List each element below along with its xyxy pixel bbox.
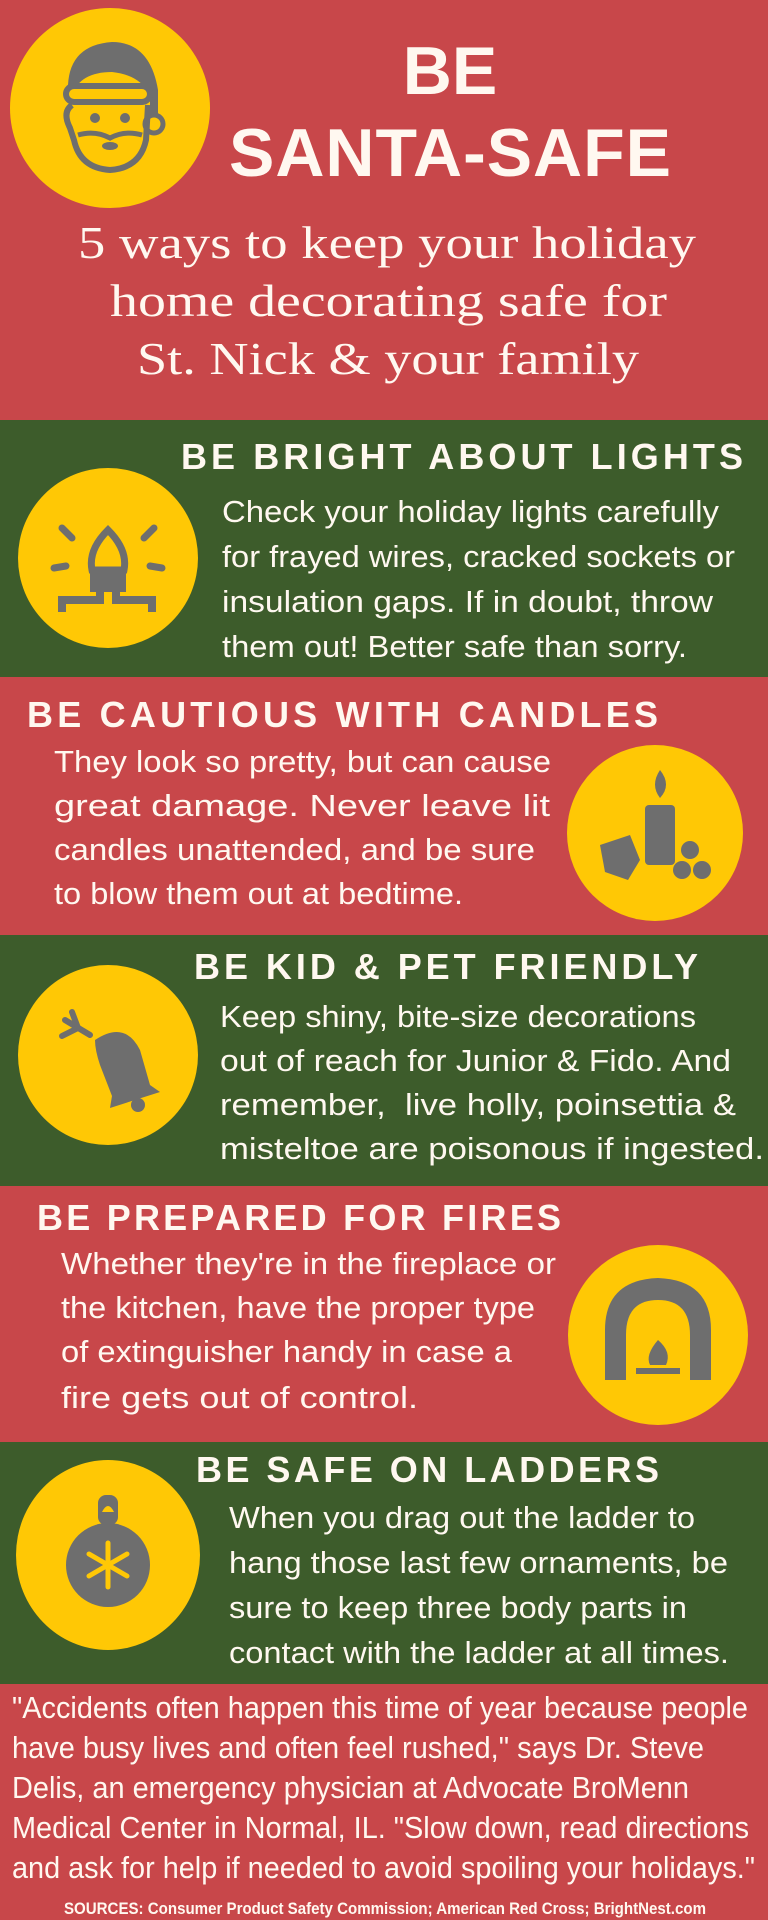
title: BE [403, 33, 497, 109]
subtitle: 5 ways to keep your holiday [78, 217, 696, 268]
icon: fireplace [568, 1245, 748, 1425]
heading: fires: BE PREPARED FOR FIRES [37, 1197, 561, 1238]
icon: bell [18, 965, 198, 1145]
text: candles: candles unattended, and be sure [54, 832, 535, 867]
panel: ladders [0, 1442, 768, 1684]
heading: candles: BE CAUTIOUS WITH CANDLES [27, 694, 658, 735]
text: ladders: When you drag out the ladder to [229, 1500, 695, 1535]
text: ladders [229, 1500, 729, 1670]
subtitle: St. Nick & your family [137, 333, 639, 384]
text: kids: misteltoe are poisonous if ingested. [220, 1131, 764, 1166]
text: fires: of extinguisher handy in case a [61, 1334, 513, 1369]
text: candles [54, 744, 551, 911]
text: candles: They look so pretty, but can cause [54, 744, 551, 779]
icon: light bulb [18, 468, 198, 648]
panel: quote [0, 1684, 768, 1920]
text: lights: for frayed wires, cracked sockets or [222, 539, 735, 574]
heading: lights: BE BRIGHT ABOUT LIGHTS [181, 436, 743, 477]
text: lights: them out! Better safe than sorry. [222, 629, 687, 664]
text: lights [222, 494, 735, 664]
text: candles: great damage. Never leave lit [54, 788, 550, 823]
text: fires: the kitchen, have the proper type [61, 1290, 535, 1325]
icon: santa [10, 8, 210, 208]
text: ladders: sure to keep three body parts in [229, 1590, 687, 1625]
text: ladders: hang those last few ornaments, be [229, 1545, 728, 1580]
title: SANTA-SAFE [229, 115, 671, 191]
text: lights: Check your holiday lights carefully [222, 494, 720, 529]
text: fires: Whether they're in the fireplace or [61, 1246, 556, 1281]
title [229, 33, 671, 191]
panel: fires [0, 1186, 768, 1442]
quote text: have busy lives and often feel rushed," says Dr. Steve [12, 1730, 704, 1765]
subtitle [78, 217, 696, 384]
text: fires [61, 1246, 556, 1415]
text: fires: fire gets out of control. [61, 1380, 418, 1415]
panel: header [0, 0, 768, 420]
text: ladders: contact with the ladder at all times. [229, 1635, 729, 1670]
heading: ladders: BE SAFE ON LADDERS [196, 1449, 659, 1490]
text: lights: insulation gaps. If in doubt, throw [222, 584, 714, 619]
quote text [12, 1690, 755, 1885]
sources: SOURCES: Consumer Product Safety Commission; American Red Cross; BrightNest.com [64, 1899, 706, 1918]
text: kids: out of reach for Junior & Fido. And [220, 1043, 731, 1078]
subtitle: home decorating safe for [110, 275, 667, 326]
panel: candles [0, 677, 768, 935]
text: kids: Keep shiny, bite-size decorations [220, 999, 696, 1034]
icon: candle [567, 745, 743, 921]
panel: lights [0, 420, 768, 677]
quote text: Delis, an emergency physician at Advocate BroMenn [12, 1770, 689, 1805]
panel: kids and pets [0, 935, 768, 1186]
text: kids [220, 999, 764, 1166]
icon: ornament [16, 1460, 200, 1650]
text: kids: remember, live holly, poinsettia & [220, 1087, 736, 1122]
text: candles: to blow them out at bedtime. [54, 876, 463, 911]
heading: kids: BE KID & PET FRIENDLY [194, 946, 698, 987]
